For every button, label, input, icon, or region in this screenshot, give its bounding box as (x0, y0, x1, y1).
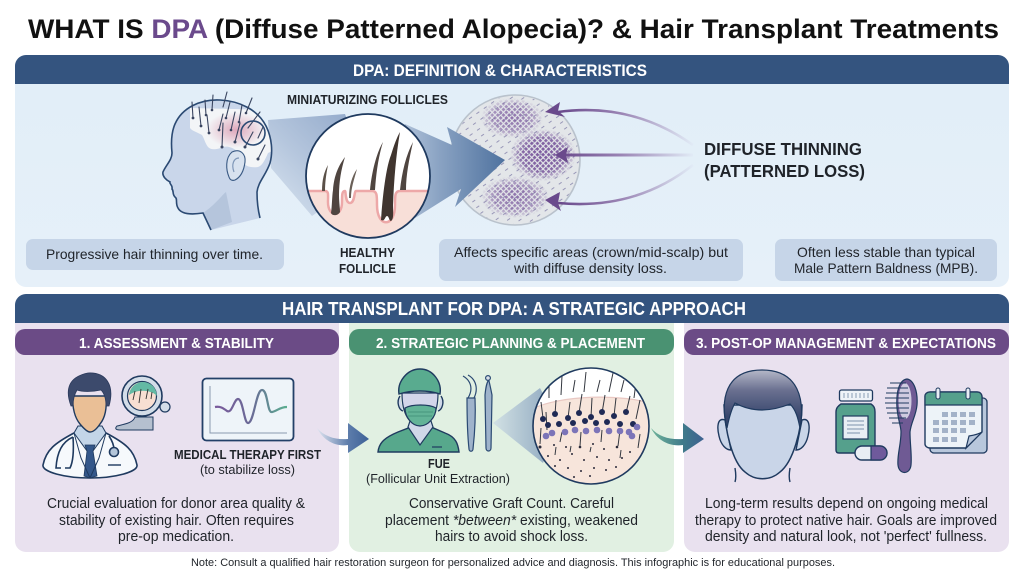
icon: large arrow to scalp (395, 124, 505, 218)
section header: definition: DPA: DEFINITION & CHARACTERISTICS (353, 61, 647, 80)
label: FUE: (Follicular Unit Extraction) (366, 471, 510, 486)
step 1 header: 1. ASSESSMENT & STABILITY (79, 335, 274, 352)
icon: surgeon (378, 369, 459, 452)
step 2 header: 2. STRATEGIC PLANNING & PLACEMENT (376, 335, 645, 352)
step 2 header (349, 329, 674, 355)
callout: stability (775, 239, 997, 281)
label: FUE: FUE (428, 456, 450, 471)
arrows: diffuse thinning pointers (545, 102, 693, 211)
body text step 1: Crucial evaluation for donor area quality & (47, 496, 305, 512)
label: medical therapy first: (to stabilize loss) (200, 462, 295, 477)
label: medical therapy first (174, 447, 321, 477)
icon: calendar (925, 388, 987, 453)
label: healthy follicle: FOLLICLE (339, 261, 396, 276)
body text step 2: placement *between* existing, weakened (385, 513, 638, 529)
footnote: Note: Consult a qualified hair restoration surgeon for personalized advice and diagnosis. This infographic is for educational purposes. (191, 557, 835, 569)
icon: graft placement circle (530, 368, 652, 484)
label: miniaturizing follicles: MINIATURIZING FOLLICLES (287, 92, 448, 107)
callout: affects: Affects specific areas (crown/mid-scalp) but (454, 244, 728, 260)
body text step 1: pre-op medication. (118, 529, 234, 545)
label: healthy follicle: HEALTHY (340, 245, 395, 260)
section header: hair transplant strategy (15, 294, 1009, 323)
body text step 2 (385, 496, 638, 545)
step 3 header: 3. POST-OP MANAGEMENT & EXPECTATIONS (696, 335, 996, 352)
panel: step 3 post-op (684, 310, 1009, 552)
label: diffuse thinning (704, 139, 865, 181)
callout: affects: with diffuse density loss. (513, 260, 667, 276)
icon: surgical tools (463, 375, 492, 451)
chart: stabilizing wave (202, 378, 294, 440)
label: medical therapy first: MEDICAL THERAPY FIRST (174, 447, 321, 462)
callout: progressive: Progressive hair thinning over time. (46, 246, 263, 262)
callout: progressive (26, 239, 284, 270)
title: WHAT IS DPA (Diffuse Patterned Alopecia)? & Hair Transplant Treatments (28, 14, 999, 44)
section header: definition (15, 55, 1009, 84)
body text step 2: Conservative Graft Count. Careful (409, 496, 614, 512)
section header: hair transplant strategy: HAIR TRANSPLANT FOR DPA: A STRATEGIC APPROACH (282, 299, 746, 319)
step 3 header (684, 329, 1009, 355)
icon: cone into graft circle (493, 388, 560, 463)
label: healthy follicle (339, 245, 396, 276)
step 1 header (15, 329, 339, 355)
body text step 2: hairs to avoid shock loss. (435, 529, 588, 545)
arrow: step 1 to step 2 (317, 423, 369, 453)
callout: stability: Often less stable than typical (797, 244, 975, 260)
panel: step 1 assessment (15, 310, 339, 552)
icon: follicle cross-section circle (305, 113, 431, 239)
callout: stability: Male Pattern Baldness (MPB). (794, 260, 978, 276)
icon: scalp with diffuse thinning (446, 94, 580, 228)
arrow: step 2 to step 3 (651, 423, 704, 453)
body text step 3: density and natural look, not 'perfect' fullness. (705, 529, 987, 545)
icon: doctor (43, 373, 137, 478)
body text step 3: therapy to protect native hair. Goals are improved (695, 513, 997, 529)
body text step 1 (47, 496, 305, 545)
panel: step 2 planning (349, 310, 674, 552)
icon: front head with restored hair (718, 370, 809, 482)
icon: hair brush (885, 379, 917, 472)
label: diffuse thinning: DIFFUSE THINNING (704, 139, 862, 159)
body text step 3: Long-term results depend on ongoing medical (705, 496, 988, 512)
icon: magnifier over scalp (116, 376, 170, 430)
label: diffuse thinning: (PATTERNED LOSS) (704, 161, 865, 181)
magnifier circle on scalp (241, 121, 265, 145)
label: FUE (366, 456, 510, 486)
body text step 3 (695, 496, 997, 545)
panel: DPA definition and characteristics (15, 55, 1009, 287)
callout: affects (439, 239, 743, 281)
icon: cone from head to follicle (268, 114, 368, 216)
icon: medication bottle and pill (836, 390, 887, 460)
icon: head profile with thinning hair (163, 92, 275, 230)
body text step 1: stability of existing hair. Often requires (59, 513, 294, 529)
